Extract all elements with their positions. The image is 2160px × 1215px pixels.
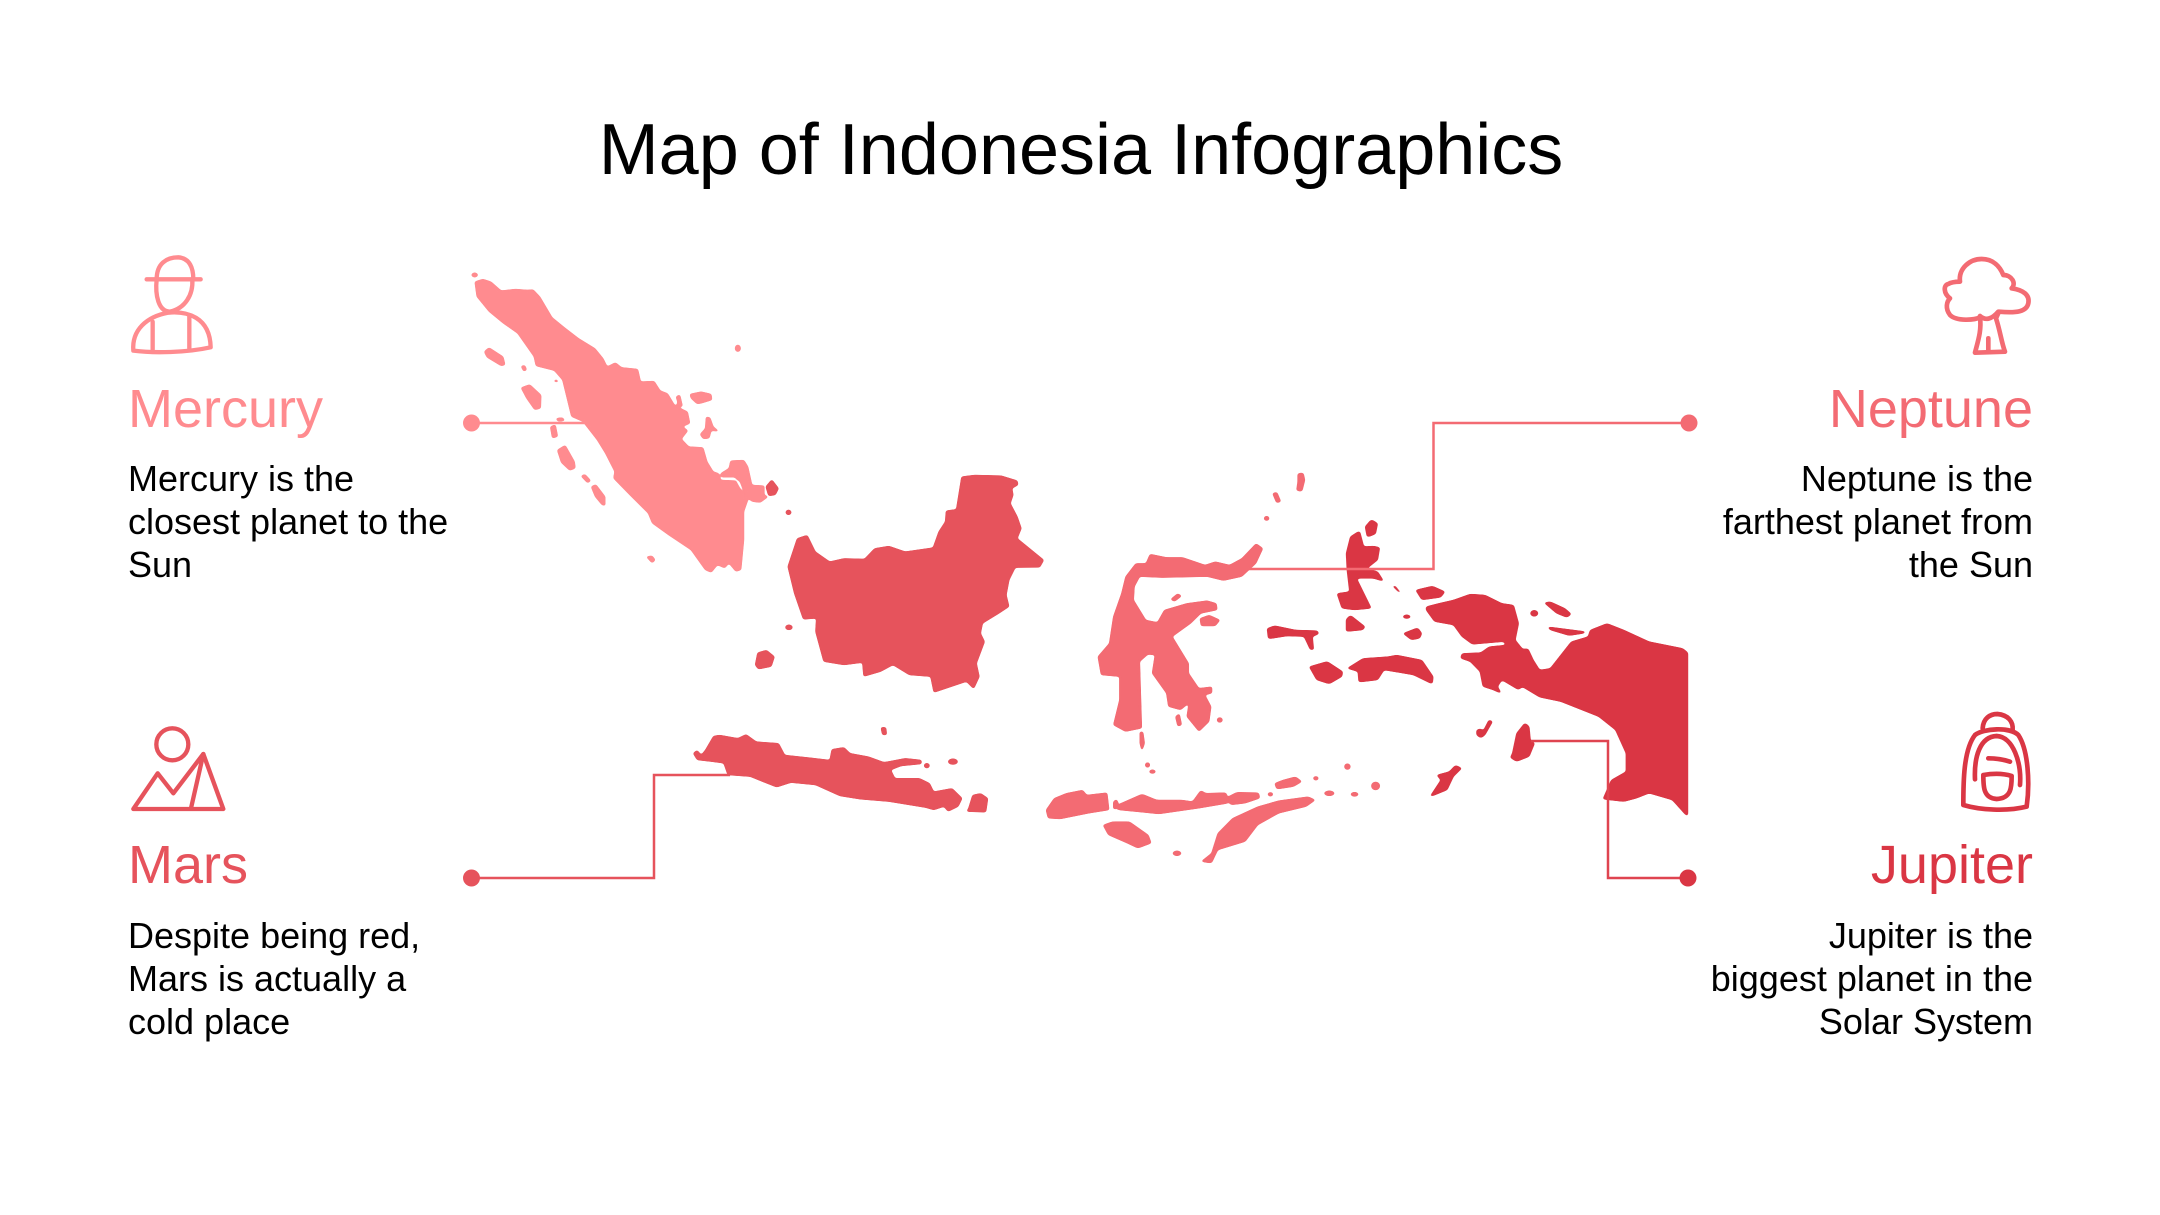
heading: Mars: Mars [128,835,248,895]
title: Map of Indonesia Infographics [599,110,1563,190]
connector: Jupiter [1531,741,1696,886]
text: Jupiter description: Solar System [1819,1001,2033,1042]
text: Jupiter description: Jupiter is the [1829,915,2033,956]
region: Sulawesi and Lesser Sunda [1046,473,1380,863]
map of Indonesia [471,273,1688,863]
region: Kalimantan and Java [693,475,1044,812]
region: Sumatra [471,273,768,573]
text: Neptune description: farthest planet from [1723,501,2033,542]
text: Mars description: cold place [128,1001,290,1042]
icon: worker [133,257,211,352]
connector: Mercury [463,414,585,432]
icon: backpack [1963,714,2028,810]
text: Mercury description: Mercury is the [128,458,354,499]
text: Mars description: Mars is actually a [128,958,407,999]
island: Sulawesi [1046,543,1263,819]
panel: Mercury [128,257,448,585]
icon: mountain and sun [133,728,223,809]
text: Neptune description: the Sun [1909,544,2033,585]
text: Mercury description: closest planet to the [128,501,448,542]
panel: Neptune [1723,259,2033,585]
heading: Mercury: Mercury [128,379,323,439]
text: Jupiter description: biggest planet in the [1711,958,2033,999]
panel: Jupiter [1711,714,2033,1042]
heading: Neptune: Neptune [1829,379,2033,439]
text: Neptune description: Neptune is the [1801,458,2033,499]
islands: Flores, Sumba and Timor [1103,473,1380,863]
text: Mars description: Despite being red, [128,915,420,956]
connector: Neptune [1249,414,1698,569]
region: Maluku and Papua [1267,519,1688,817]
icon: tree [1945,259,2029,353]
text: Mercury description: Sun [128,544,192,585]
heading: Jupiter: Jupiter [1871,835,2033,895]
connector: Mars [463,775,730,886]
panel: Mars [128,728,420,1042]
